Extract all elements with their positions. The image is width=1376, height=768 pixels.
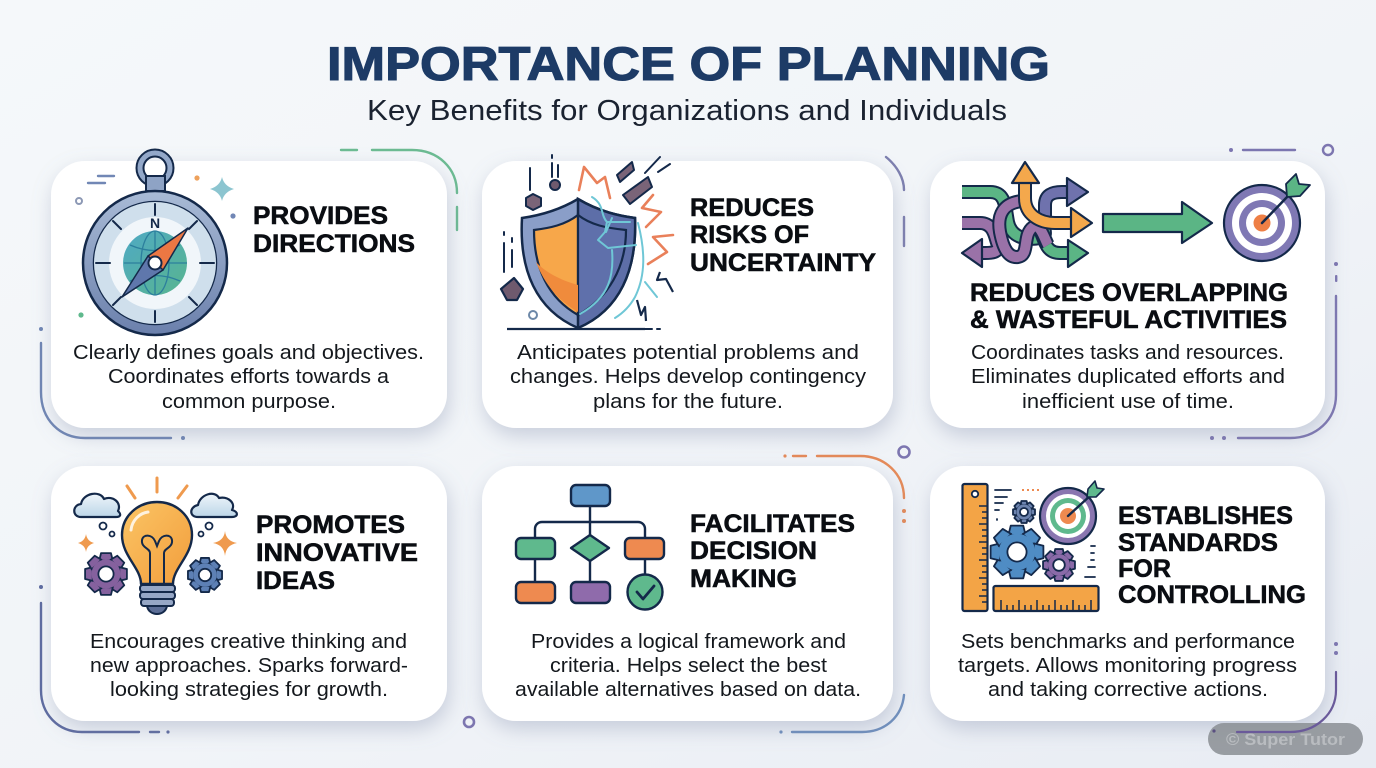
description: Coordinates efforts towards a [108,365,390,388]
panel: reduces overlapping and wasteful activities [930,161,1325,428]
panel: promotes innovative ideas [51,466,447,721]
icon: flowchart [516,485,664,610]
description [90,630,408,701]
heading [690,510,855,593]
subtitle: Key Benefits for Organizations and Individuals [367,95,1007,127]
watermark [1208,672,1363,755]
heading [970,279,1288,334]
description: available alternatives based on data. [515,678,861,701]
description: Sets benchmarks and performance [961,630,1295,653]
description: changes. Helps develop contingency [510,365,867,388]
description: inefficient use of time. [1022,390,1234,413]
panel: provides directions [51,153,447,428]
heading [256,511,418,595]
description: Coordinates tasks and resources. [971,341,1284,364]
icon: tangled arrows to target [962,162,1310,267]
description: targets. Allows monitoring progress [958,654,1297,677]
description: plans for the future. [593,390,783,413]
description [971,341,1285,413]
heading: ESTABLISHES [1118,502,1293,530]
icon: shield [501,155,673,329]
description: Anticipates potential problems and [517,341,859,364]
heading: PROVIDES [253,202,388,230]
heading: DECISION [690,537,817,565]
description [510,341,867,413]
description: new approaches. Sparks forward- [90,654,408,677]
heading: FOR [1118,555,1171,583]
description: Clearly defines goals and objectives. [73,341,424,364]
heading [690,194,876,277]
heading [253,202,415,258]
icon: lightbulb [74,478,237,614]
heading [1118,502,1306,609]
heading: PROMOTES [256,511,405,539]
watermark: © Super Tutor [1226,730,1345,749]
heading: FACILITATES [690,510,855,538]
description: common purpose. [162,390,336,413]
heading: IDEAS [256,567,335,595]
heading: CONTROLLING [1118,581,1306,609]
heading: REDUCES [690,194,814,222]
heading: UNCERTAINTY [690,249,876,277]
description [73,341,424,413]
panel: reduces risks of uncertainty [482,155,893,428]
panel: establishes standards for controlling [930,466,1325,721]
icon: compass [76,153,236,335]
heading: REDUCES OVERLAPPING [970,279,1288,307]
description: and taking corrective actions. [988,678,1268,701]
description [958,630,1297,701]
description: criteria. Helps select the best [550,654,827,677]
description: Encourages creative thinking and [90,630,407,653]
description [515,630,861,701]
heading: STANDARDS [1118,529,1278,557]
heading: INNOVATIVE [256,539,418,567]
title: IMPORTANCE OF PLANNING [327,37,1050,90]
icon: rulers gears target [962,481,1104,611]
heading: MAKING [690,565,797,593]
heading: RISKS OF [690,221,809,249]
heading: & WASTEFUL ACTIVITIES [970,306,1287,334]
panel: facilitates decision making [482,466,893,721]
description: Provides a logical framework and [531,630,846,653]
description: looking strategies for growth. [110,678,388,701]
icon: compass: N [150,215,160,231]
description: Eliminates duplicated efforts and [971,365,1285,388]
heading: DIRECTIONS [253,230,415,258]
